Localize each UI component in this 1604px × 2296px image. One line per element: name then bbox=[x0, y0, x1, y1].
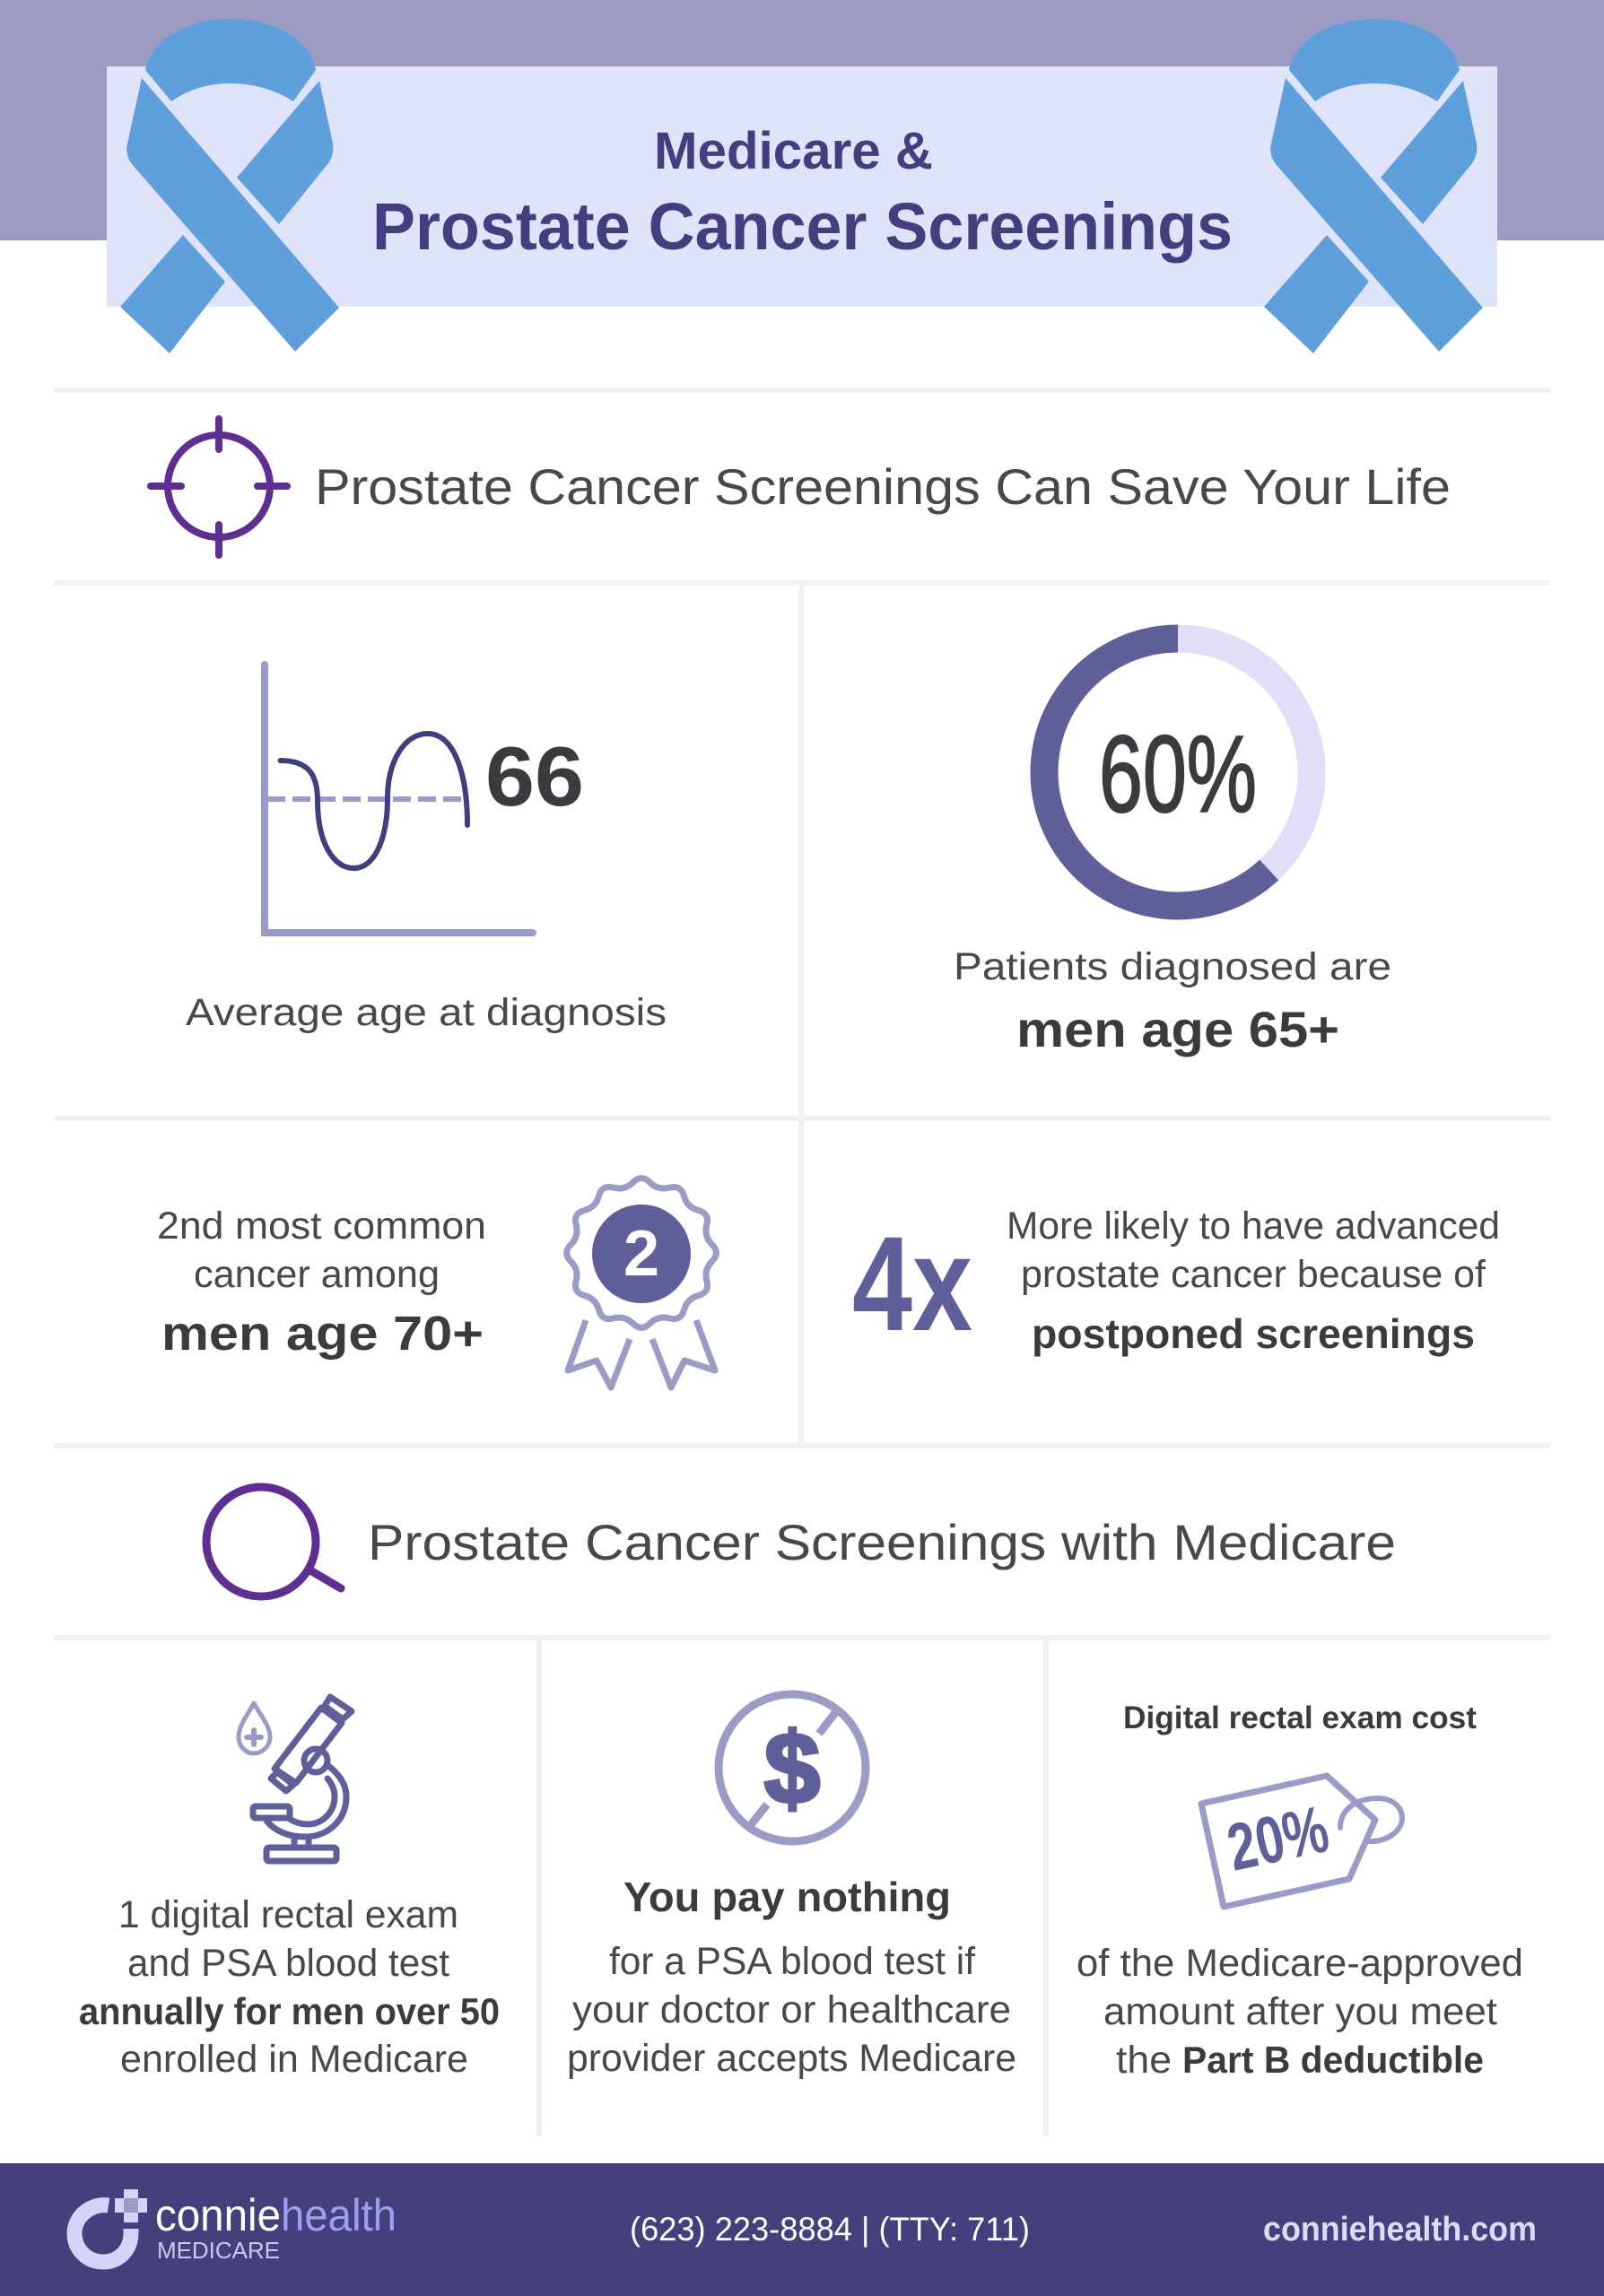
icon: target bbox=[151, 419, 287, 555]
caption: pay nothing: for a PSA blood test if bbox=[609, 1940, 976, 1983]
stat: 4x: 4x bbox=[852, 1208, 972, 1359]
logo: conniehealth medicare: connie bbox=[155, 2190, 281, 2240]
caption: annual exam: 1 digital rectal exam bbox=[118, 1893, 458, 1936]
caption: second most common cancer bbox=[157, 1205, 486, 1361]
caption: annual exam: and PSA blood test bbox=[127, 1942, 449, 1985]
caption: postponed screenings bbox=[1007, 1205, 1500, 1357]
title banner bbox=[107, 66, 1497, 307]
stat: 66: 66 bbox=[485, 729, 584, 823]
icon: magnifying glass bbox=[206, 1487, 341, 1596]
caption: pay nothing: provider accepts Medicare bbox=[567, 2037, 1016, 2080]
logo: conniehealth medicare: MEDICARE bbox=[157, 2237, 280, 2264]
caption: annual exam: annually for men over 50 bbox=[79, 1990, 500, 2032]
panel: average age bbox=[186, 665, 667, 1034]
label: digital rectal exam cost: Digital rectal exam cost bbox=[1123, 1700, 1477, 1735]
icon: microscope and blood drop bbox=[239, 1697, 352, 1861]
caption: patients diagnosed: men age 65+ bbox=[1016, 1001, 1339, 1057]
footer bbox=[0, 2163, 1604, 2296]
icon: left awareness ribbon bbox=[120, 19, 339, 353]
panel: annual exam bbox=[79, 1697, 500, 2081]
caption: annual exam: enrolled in Medicare bbox=[120, 2038, 468, 2081]
panel: second most common bbox=[157, 1178, 716, 1387]
caption: cost: of the Medicare-approved bbox=[1077, 1942, 1523, 1985]
caption: second most common cancer: cancer among bbox=[194, 1253, 440, 1296]
icon: crossed-out dollar bbox=[719, 1694, 866, 1841]
caption: second most common cancer: 2nd most common bbox=[157, 1205, 486, 1248]
caption: postponed screenings: prostate cancer because of bbox=[1021, 1253, 1486, 1296]
icon: 20 percent price tag bbox=[1201, 1776, 1402, 1907]
title: Prostate Cancer Screenings bbox=[372, 189, 1233, 264]
panel: you pay nothing bbox=[567, 1694, 1016, 2080]
icon: 20 percent price tag: 20% bbox=[1221, 1791, 1335, 1885]
heading: screenings with medicare: Prostate Cancer Screenings with Medicare bbox=[368, 1514, 1396, 1570]
caption: pay nothing: You pay nothing bbox=[623, 1874, 951, 1920]
icon: crossed-out dollar: $ bbox=[764, 1712, 820, 1824]
caption: cost bbox=[1077, 1942, 1523, 2082]
donut chart bbox=[1044, 639, 1312, 906]
panel: exam cost bbox=[1077, 1700, 1523, 2082]
caption: patients diagnosed: Patients diagnosed are bbox=[954, 945, 1391, 988]
caption: pay nothing bbox=[567, 1874, 1016, 2080]
caption: postponed screenings: More likely to have advanced bbox=[1007, 1205, 1500, 1248]
caption: cost: amount after you meet bbox=[1103, 1990, 1497, 2033]
logo: conniehealth medicare bbox=[74, 2189, 397, 2264]
caption: annual exam bbox=[79, 1893, 500, 2081]
logo: conniehealth medicare: health bbox=[281, 2190, 397, 2240]
caption: patients diagnosed bbox=[954, 945, 1391, 1057]
caption: postponed screenings: postponed screenings bbox=[1032, 1310, 1475, 1357]
contact: phone: (623) 223-8884 | (TTY: 711) bbox=[630, 2211, 1030, 2248]
title: Medicare & bbox=[654, 122, 933, 180]
caption: cost: the bbox=[1116, 2039, 1172, 2082]
caption: pay nothing: your doctor or healthcare bbox=[572, 1988, 1011, 2031]
icon: right awareness ribbon bbox=[1264, 19, 1483, 353]
panel: 4x more likely bbox=[852, 1205, 1500, 1359]
line chart icon bbox=[265, 665, 533, 933]
heading: screenings can save your life: Prostate Cancer Screenings Can Save Your Life bbox=[315, 458, 1451, 515]
header band bbox=[0, 0, 1604, 240]
icon: medal: 2 bbox=[623, 1218, 659, 1290]
caption: cost: Part B deductible bbox=[1182, 2039, 1484, 2081]
contact: website: conniehealth.com bbox=[1263, 2211, 1537, 2248]
panel: 60 percent bbox=[954, 639, 1391, 1057]
caption: average age: Average age at diagnosis bbox=[186, 991, 667, 1034]
stat: 60%: 60% bbox=[1099, 713, 1257, 835]
title bbox=[372, 122, 1233, 264]
caption: second most common cancer: men age 70+ bbox=[161, 1307, 484, 1361]
icon: medal bbox=[567, 1178, 716, 1387]
